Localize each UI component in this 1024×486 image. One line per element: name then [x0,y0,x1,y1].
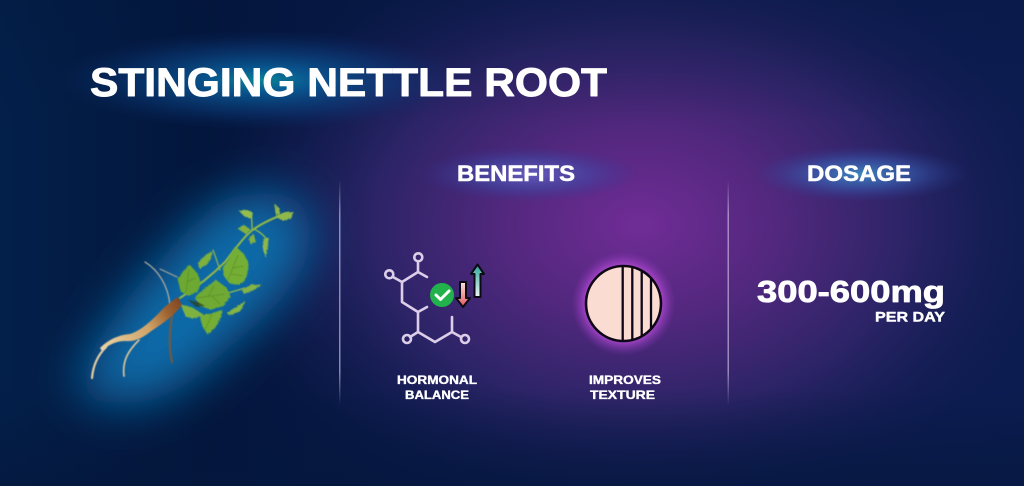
divider left [339,180,340,405]
icon: red down arrow [456,282,470,307]
label: hormonal balance: HORMONAL [397,375,477,387]
dosage unit: PER DAY [875,308,946,324]
heading glow: dosage [752,146,968,202]
icon: green check badge [430,283,454,307]
label: improves texture [589,375,661,402]
heading: benefits: BENEFITS [457,161,575,186]
leaf shadow [188,300,205,307]
leaf veins [186,255,244,330]
title: STINGING NETTLE ROOT [90,61,607,105]
thin rootlets [92,262,177,378]
stems [180,205,287,298]
icon: teal up arrow [471,264,484,297]
label: hormonal balance: BALANCE [405,390,469,402]
leaves [177,204,293,334]
divider right [728,180,729,405]
heading glow: benefits [420,146,640,202]
main root [100,297,182,351]
heading: dosage: DOSAGE [807,161,911,186]
icon: hormonal balance molecule [385,253,484,343]
illustration: nettle root plant [92,204,293,378]
title glow [57,30,467,130]
molecule bonds [385,253,469,343]
label: hormonal balance [397,375,477,402]
label: improves texture: IMPROVES [589,375,661,387]
plant glow [78,192,312,404]
dosage amount: 300-600mg [757,274,945,309]
label: improves texture: TEXTURE [590,390,655,402]
icon: skin texture circle [572,252,676,356]
